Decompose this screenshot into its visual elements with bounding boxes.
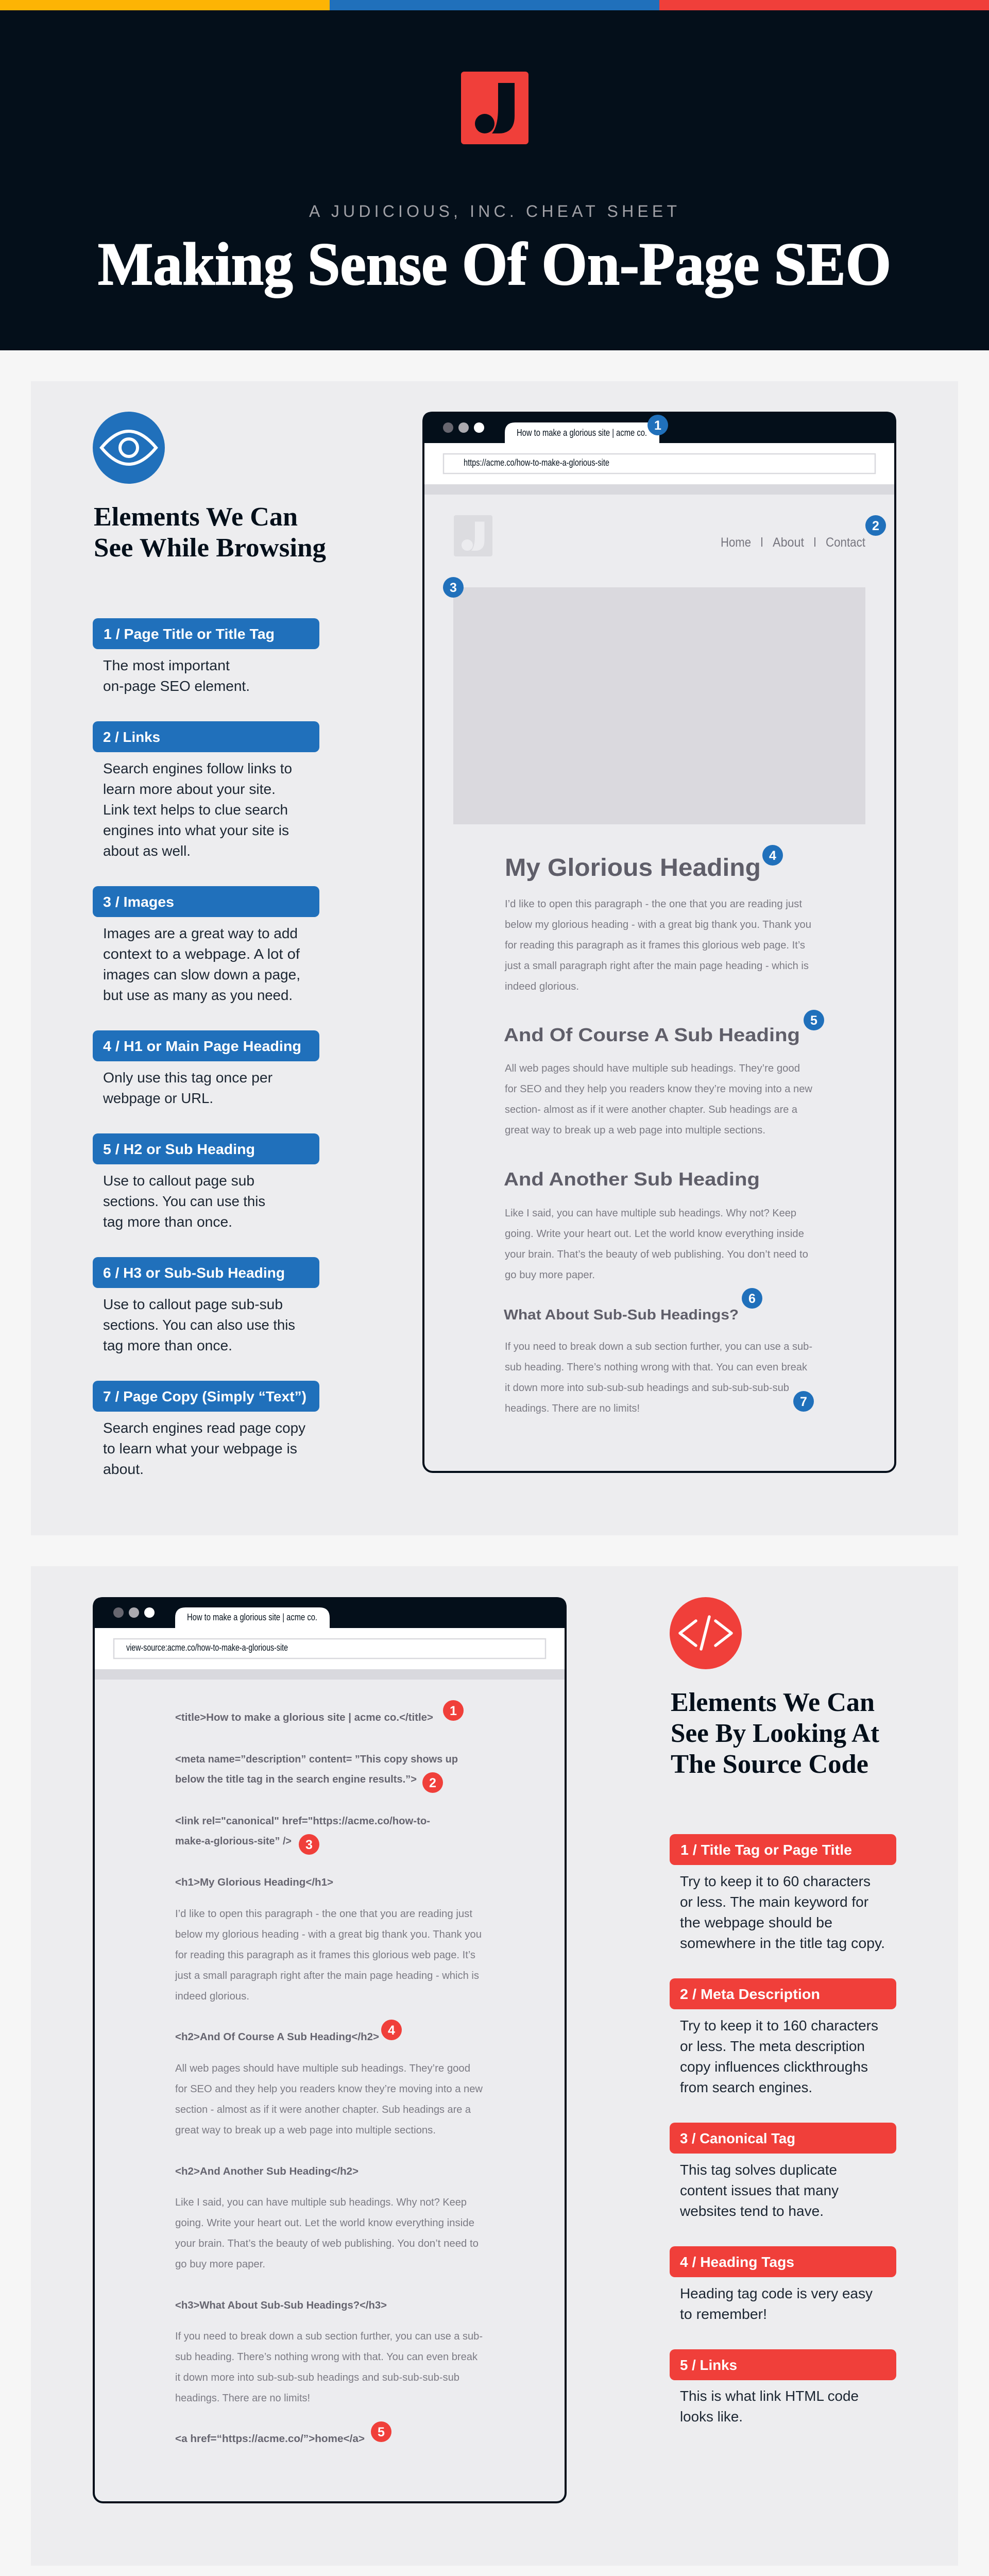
paragraph 2: great way to break up a web page into multiple sections. (505, 1125, 765, 1136)
item 5: sections. You can use this (103, 1193, 265, 1209)
paragraph 1: indeed glorious. (175, 1991, 249, 2002)
browser tab: How to make a glorious site | acme co. (187, 1612, 317, 1622)
badge 1 (647, 415, 668, 435)
item 1: Try to keep it to 60 characters (680, 1873, 871, 1889)
paragraph 1: below my glorious heading - with a great big thank you. Thank you (175, 1929, 482, 1940)
item 4 (93, 1030, 319, 1106)
item 2: Search engines follow links to (103, 760, 292, 776)
page heading H1: My Glorious Heading (505, 854, 761, 882)
browser tab: How to make a glorious site | acme co. (517, 428, 647, 438)
heading (94, 502, 326, 563)
item 3: images can slow down a page, (103, 967, 300, 982)
item 5: tag more than once. (103, 1214, 232, 1230)
image placeholder (453, 587, 865, 824)
paragraph 4: it down more into sub-sub-sub headings and sub-sub-sub-sub (505, 1382, 789, 1394)
paragraph 3 (505, 1208, 808, 1281)
item 3 (670, 2123, 896, 2219)
code: canonical link: <link rel="canonical" href="https://acme.co/how-to- (175, 1816, 430, 1827)
sub heading H2 second: And Another Sub Heading (504, 1168, 760, 1190)
item 4: 4 / Heading Tags (680, 2254, 794, 2270)
site logo placeholder (454, 515, 492, 556)
badge 1: 1 (654, 418, 661, 433)
paragraph 1: just a small paragraph right after the main page heading - which is (504, 960, 809, 972)
paragraph 2: section- almost as if it were another chapter. Sub headings are a (505, 1104, 798, 1115)
item 7: about. (103, 1461, 144, 1477)
paragraph 3: your brain. That’s the beauty of web publishing. You don’t need to (175, 2238, 479, 2249)
item 3: websites tend to have. (679, 2203, 824, 2219)
paragraph 3: go buy more paper. (175, 2259, 265, 2270)
item 6: Use to callout page sub-sub (103, 1296, 283, 1312)
badge 1 (443, 1700, 464, 1721)
item 2: from search engines. (680, 2079, 812, 2095)
badge 2: 2 (872, 519, 879, 533)
code: canonical link: make-a-glorious-site” /> (175, 1836, 292, 1847)
badge 4 (762, 845, 783, 866)
icon: eye (93, 412, 165, 484)
icon: code brackets (670, 1597, 742, 1669)
browser mockup: rendered page (422, 412, 896, 1472)
paragraph 3: your brain. That’s the beauty of web publishing. You don’t need to (505, 1249, 808, 1260)
badge 6 (742, 1288, 762, 1309)
heading: See While Browsing (94, 533, 326, 563)
address bar: https://acme.co/how-to-make-a-glorious-site (464, 457, 609, 468)
code: meta description (175, 1754, 458, 1785)
paragraph 2: great way to break up a web page into multiple sections. (175, 2125, 436, 2136)
item 2: about as well. (103, 843, 191, 859)
code: meta description: below the title tag in the search engine results.”> (175, 1774, 417, 1785)
paragraph 4 (505, 1341, 812, 1414)
code: title tag: <title>How to make a glorious site | acme co.</title> (175, 1712, 433, 1723)
item 7: 7 / Page Copy (Simply “Text”) (103, 1388, 306, 1404)
heading: Elements We Can (671, 1688, 875, 1717)
paragraph 4: If you need to break down a sub section further, you can use a sub- (175, 2331, 483, 2342)
item 6: 6 / H3 or Sub-Sub Heading (103, 1265, 285, 1281)
item 1 (93, 618, 319, 694)
browser mockup: source view (93, 1597, 567, 2502)
item 5 (93, 1133, 319, 1230)
item 1 (670, 1834, 896, 1951)
badge 2 (865, 515, 886, 536)
item 2: Try to keep it to 160 characters (680, 2018, 878, 2033)
paragraph 2 (505, 1063, 813, 1136)
item 2: 2 / Links (103, 729, 160, 745)
badge 5: 5 (378, 2425, 385, 2439)
item 7: Search engines read page copy (103, 1420, 305, 1436)
item 5: 5 / Links (680, 2357, 737, 2373)
paragraph 3: going. Write your heart out. Let the world know everything inside (505, 1228, 804, 1240)
item 1: the webpage should be (680, 1914, 832, 1930)
paragraph 3 (175, 2197, 479, 2270)
paragraph 2 (175, 2063, 483, 2136)
paragraph 1: for reading this paragraph as it frames this glorious web page. It’s (175, 1950, 475, 1961)
paragraph 3: Like I said, you can have multiple sub headings. Why not? Keep (175, 2197, 467, 2208)
code: meta description: <meta name=”description” content= ”This copy shows up (175, 1754, 458, 1765)
heading: Elements We Can (94, 502, 298, 532)
paragraph 1: indeed glorious. (505, 981, 579, 992)
item 5: Use to callout page sub (103, 1173, 254, 1189)
badge 1: 1 (450, 1704, 457, 1718)
item 3: context to a webpage. A lot of (103, 946, 300, 962)
paragraph 2: for SEO and they help you readers know they’re moving into a new (175, 2083, 483, 2095)
item 1: somewhere in the title tag copy. (680, 1935, 885, 1951)
item 4: Only use this tag once per (103, 1070, 272, 1086)
paragraph 3: Like I said, you can have multiple sub headings. Why not? Keep (505, 1208, 796, 1219)
item 2: 2 / Meta Description (680, 1986, 820, 2002)
paragraph 1 (175, 1908, 482, 2002)
item 3: 3 / Canonical Tag (680, 2130, 795, 2146)
item 4: 4 / H1 or Main Page Heading (103, 1038, 301, 1054)
item 2 (93, 721, 319, 859)
badge 4 (381, 2020, 402, 2040)
badge 7: 7 (800, 1395, 807, 1409)
paragraph 3: go buy more paper. (505, 1269, 595, 1281)
paragraph 2: All web pages should have multiple sub headings. They’re good (175, 2063, 470, 2074)
item 3 (93, 886, 319, 1003)
badge 3 (443, 577, 464, 598)
paragraph 4: sub heading. There’s nothing wrong with that. You can even break (505, 1362, 808, 1373)
site navigation: Contact (826, 535, 865, 550)
item 1: 1 / Page Title or Title Tag (104, 626, 275, 642)
paragraph 4: sub heading. There’s nothing wrong with that. You can even break (175, 2351, 478, 2363)
code: h2: <h2>And Of Course A Sub Heading</h2> (175, 2031, 379, 2043)
item 6: sections. You can also use this (103, 1317, 295, 1333)
paragraph 4: it down more into sub-sub-sub headings and sub-sub-sub-sub (175, 2372, 459, 2383)
item 3: content issues that many (680, 2182, 839, 2198)
site navigation (721, 535, 865, 550)
heading (671, 1688, 880, 1779)
item 2 (670, 1978, 896, 2095)
code: h3: <h3>What About Sub-Sub Headings?</h3> (175, 2300, 387, 2311)
item 7: to learn what your webpage is (103, 1440, 297, 1456)
item 3: but use as many as you need. (103, 987, 293, 1003)
heading: The Source Code (671, 1750, 868, 1779)
sub heading H2: And Of Course A Sub Heading (504, 1024, 800, 1045)
badge 3 (299, 1834, 319, 1855)
address bar: view-source:acme.co/how-to-make-a-glorious-site (126, 1642, 288, 1653)
paragraph 2: All web pages should have multiple sub headings. They’re good (505, 1063, 800, 1074)
badge 6: 6 (748, 1292, 756, 1306)
address bar (114, 1639, 545, 1658)
icon: Judicious logo (461, 72, 528, 144)
item 1: The most important (103, 657, 230, 673)
paragraph 2: for SEO and they help you readers know they’re moving into a new (505, 1083, 813, 1095)
item 2: copy influences clickthroughs (680, 2059, 868, 2075)
item 2: learn more about your site. (103, 781, 276, 797)
badge 2: 2 (429, 1776, 436, 1790)
badge 5 (804, 1010, 824, 1030)
item 5 (670, 2349, 896, 2425)
window dots (443, 422, 484, 433)
badge 3: 3 (450, 581, 457, 595)
site navigation: Home (721, 535, 751, 550)
browser tab (175, 1607, 330, 1628)
badge 3: 3 (305, 1838, 313, 1852)
browser tab (505, 422, 659, 443)
item 6: tag more than once. (103, 1337, 232, 1353)
header banner (0, 0, 989, 350)
colour stripes (0, 0, 989, 10)
subtitle: A JUDICIOUS, INC. CHEAT SHEET (309, 202, 677, 221)
badge 5 (371, 2421, 391, 2442)
item 4: to remember! (680, 2306, 767, 2322)
paragraph 1: I’d like to open this paragraph - the one that you are reading just (175, 1908, 472, 1920)
paragraph 4 (175, 2331, 483, 2404)
window dots (113, 1607, 155, 1618)
paragraph 2: section - almost as if it were another chapter. Sub headings are a (175, 2104, 471, 2115)
item 7 (93, 1381, 319, 1477)
item 1: or less. The main keyword for (680, 1894, 868, 1910)
panel: elements seen while browsing (31, 381, 958, 1535)
item 4 (670, 2246, 896, 2322)
item 3: This tag solves duplicate (680, 2162, 837, 2178)
title: Making Sense Of On-Page SEO (98, 230, 891, 298)
item 4: Heading tag code is very easy (680, 2285, 873, 2301)
item 5: looks like. (680, 2409, 743, 2425)
paragraph 1 (504, 899, 811, 992)
item 5: 5 / H2 or Sub Heading (103, 1141, 255, 1157)
panel: elements seen in the source code (31, 1566, 958, 2566)
address bar (444, 454, 875, 473)
item 1: 1 / Title Tag or Page Title (680, 1842, 852, 1858)
site navigation: About (773, 535, 804, 550)
paragraph 4: headings. There are no limits! (175, 2393, 310, 2404)
paragraph 1: below my glorious heading - with a great big thank you. Thank you (505, 919, 811, 930)
code: anchor: <a href=“https://acme.co/”>home</a> (175, 2433, 365, 2445)
badge 7 (793, 1391, 814, 1412)
code: h1: <h1>My Glorious Heading</h1> (175, 1877, 333, 1888)
paragraph 1: I’d like to open this paragraph - the one that you are reading just (505, 899, 802, 910)
paragraph 1: just a small paragraph right after the main page heading - which is (175, 1970, 479, 1981)
badge 2 (422, 1772, 443, 1793)
code: h2 second: <h2>And Another Sub Heading</h2> (175, 2166, 359, 2177)
paragraph 4: headings. There are no limits! (505, 1403, 640, 1414)
item 2: Link text helps to clue search (103, 802, 288, 818)
badge 4: 4 (388, 2023, 395, 2038)
item 2: engines into what your site is (103, 822, 289, 838)
code: canonical link (175, 1816, 430, 1847)
item 5: This is what link HTML code (680, 2388, 859, 2404)
badge 5: 5 (810, 1013, 817, 1028)
item 4: webpage or URL. (103, 1090, 213, 1106)
paragraph 3: going. Write your heart out. Let the world know everything inside (175, 2217, 474, 2229)
sub-sub heading H3: What About Sub-Sub Headings? (504, 1307, 739, 1323)
heading: See By Looking At (671, 1719, 880, 1748)
item 2: or less. The meta description (680, 2038, 865, 2054)
paragraph 4: If you need to break down a sub section further, you can use a sub- (505, 1341, 812, 1352)
item 6 (93, 1257, 319, 1353)
paragraph 1: for reading this paragraph as it frames this glorious web page. It’s (505, 940, 805, 951)
item 3: Images are a great way to add (103, 925, 298, 941)
badge 4: 4 (769, 849, 776, 863)
item 1: on-page SEO element. (103, 678, 250, 694)
item 3: 3 / Images (103, 894, 174, 910)
